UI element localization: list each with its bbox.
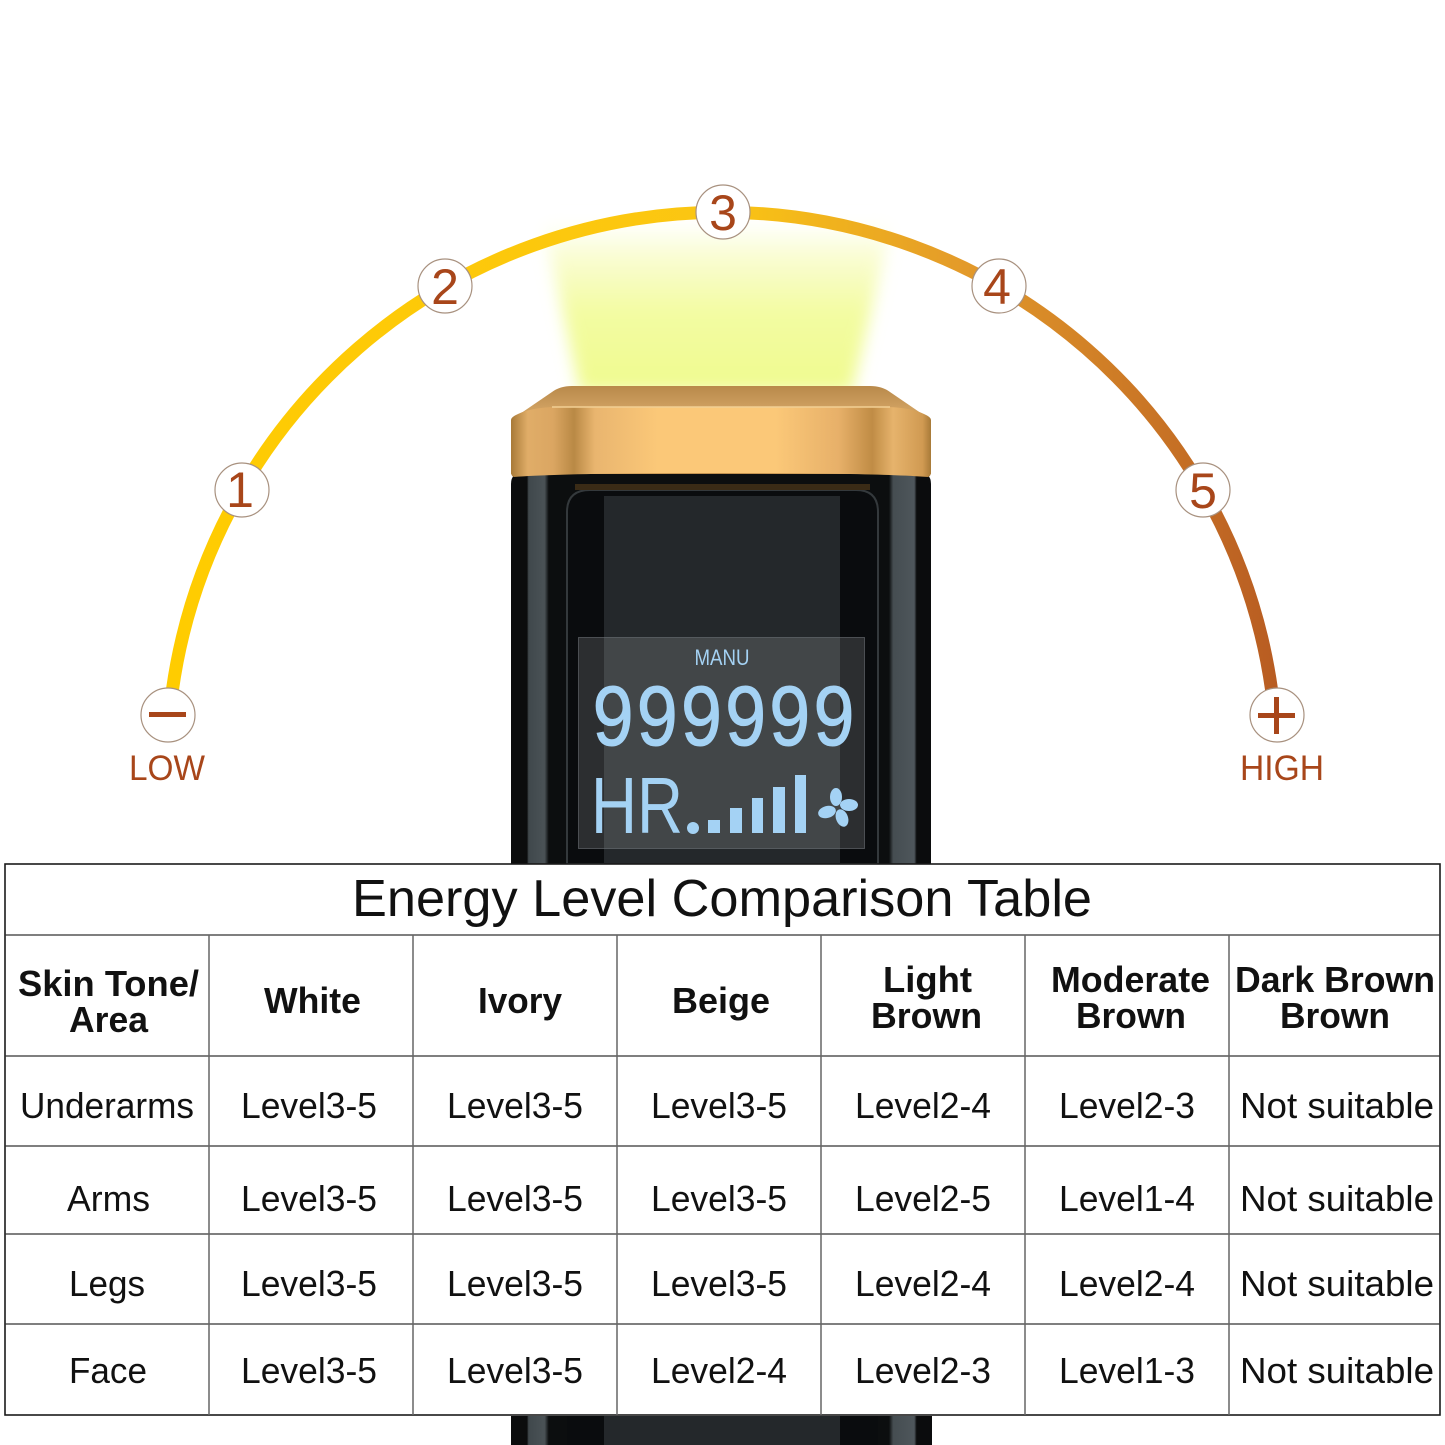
level marker: minus (141, 688, 195, 742)
level marker: 5 (1176, 463, 1230, 519)
row: face: Face (69, 1350, 147, 1391)
row: arms: Level3-5 (651, 1178, 787, 1219)
row: legs: Legs (69, 1263, 145, 1304)
row: arms: Level2-5 (855, 1178, 991, 1219)
gold cap (511, 386, 931, 477)
header row: Brown (1280, 995, 1390, 1036)
row: legs: Not suitable (1240, 1263, 1434, 1304)
row: legs (69, 1263, 1434, 1304)
header row: White (264, 980, 361, 1021)
row: arms: Not suitable (1240, 1178, 1434, 1219)
header row: Beige (672, 980, 770, 1021)
header row: Brown (1076, 995, 1186, 1036)
energy arc gauge (129, 185, 1324, 788)
label: high: HIGH (1240, 749, 1324, 788)
row: face: Level3-5 (447, 1350, 583, 1391)
header row: Moderate (1051, 959, 1210, 1000)
level marker: 1: 1 (226, 462, 254, 518)
row: face: Level2-4 (651, 1350, 787, 1391)
level marker: 3: 3 (709, 185, 737, 241)
shot counter: 999999 (591, 673, 856, 772)
table title: Energy Level Comparison Table (352, 870, 1092, 928)
row: arms: Level3-5 (447, 1178, 583, 1219)
device lower section (511, 1416, 932, 1445)
row: face: Level1-3 (1059, 1350, 1195, 1391)
energy level dots and bars (687, 775, 806, 834)
row: underarms: Level2-3 (1059, 1085, 1195, 1126)
header row: Area (69, 999, 149, 1040)
row: underarms: Not suitable (1240, 1085, 1434, 1126)
icon: cooling fan (817, 788, 858, 829)
level marker: 2 (418, 259, 472, 315)
row: legs: Level3-5 (651, 1263, 787, 1304)
row: underarms: Level3-5 (651, 1085, 787, 1126)
device (511, 386, 932, 1445)
row: arms: Level3-5 (241, 1178, 377, 1219)
row: legs: Level2-4 (1059, 1263, 1195, 1304)
LCD display (578, 638, 864, 850)
row: underarms: Level3-5 (241, 1085, 377, 1126)
row: arms: Arms (67, 1178, 150, 1219)
level marker: 4 (972, 259, 1026, 315)
label: low: LOW (129, 749, 205, 788)
header row: Dark Brown (1235, 959, 1435, 1000)
row: arms (67, 1178, 1434, 1219)
header row: Brown (871, 995, 982, 1036)
header row: Ivory (478, 980, 562, 1021)
row: underarms: Level2-4 (855, 1085, 991, 1126)
energy level comparison table (5, 864, 1440, 1415)
row: face (69, 1350, 1434, 1391)
light beam (543, 222, 892, 392)
row: legs: Level3-5 (241, 1263, 377, 1304)
row: face: Level2-3 (855, 1350, 991, 1391)
row: face: Level3-5 (241, 1350, 377, 1391)
level marker: 5: 5 (1189, 463, 1217, 519)
level marker: 3 (696, 185, 750, 241)
row: legs: Level3-5 (447, 1263, 583, 1304)
mode label: MANU (694, 645, 750, 670)
row: arms: Level1-4 (1059, 1178, 1195, 1219)
HR mode label: HR (591, 761, 683, 850)
header row: Light (883, 959, 972, 1000)
device body (511, 472, 931, 864)
table background and grid (5, 864, 1440, 1415)
screen panel (567, 484, 878, 864)
level marker: 4: 4 (983, 259, 1011, 315)
row: underarms: Level3-5 (447, 1085, 583, 1126)
row: legs: Level2-4 (855, 1263, 991, 1304)
row: face: Not suitable (1240, 1350, 1434, 1391)
level marker: plus (1250, 688, 1304, 742)
level marker: 2: 2 (431, 259, 459, 315)
header row: Skin Tone/ (18, 963, 199, 1004)
level marker: 1 (215, 462, 269, 518)
row: underarms: Underarms (20, 1085, 194, 1126)
header row (18, 959, 1435, 1040)
row: underarms (20, 1085, 1434, 1126)
